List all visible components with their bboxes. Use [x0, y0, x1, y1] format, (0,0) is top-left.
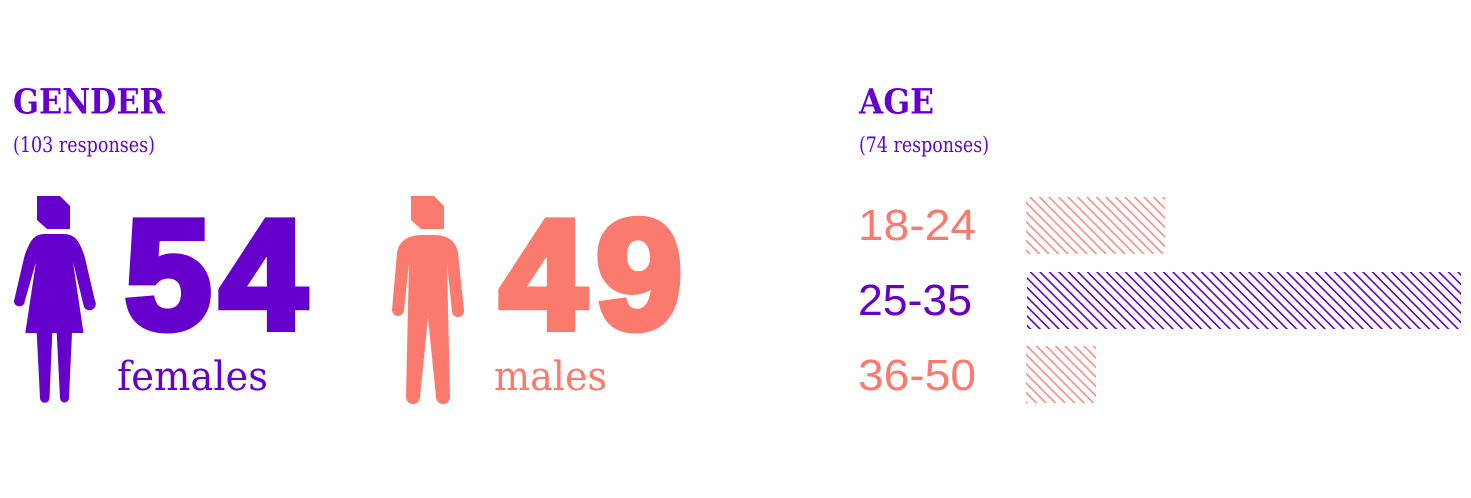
label: females: females	[117, 354, 268, 400]
bar row: 25-35: 25-35	[858, 276, 972, 325]
bar row: 36-50	[858, 346, 1096, 403]
bar row: 36-50: 36-50	[858, 351, 976, 400]
heading: age: AGE	[858, 82, 934, 122]
panel: age	[858, 82, 1461, 403]
number: 54 females: 54	[125, 188, 306, 361]
icon: female figure	[14, 196, 96, 403]
bar row: 18-24: 18-24	[858, 201, 976, 250]
number: 49 males: 49	[500, 188, 682, 361]
bar row: 18-24	[858, 197, 1165, 254]
heading: gender: GENDER	[13, 82, 166, 122]
panel: gender	[13, 82, 682, 404]
text: age response count: (74 responses)	[859, 133, 989, 157]
bar row: 25-35	[858, 272, 1461, 329]
label: males: males	[494, 354, 607, 400]
icon: male figure	[392, 196, 464, 404]
text: gender response count: (103 responses)	[13, 133, 155, 157]
